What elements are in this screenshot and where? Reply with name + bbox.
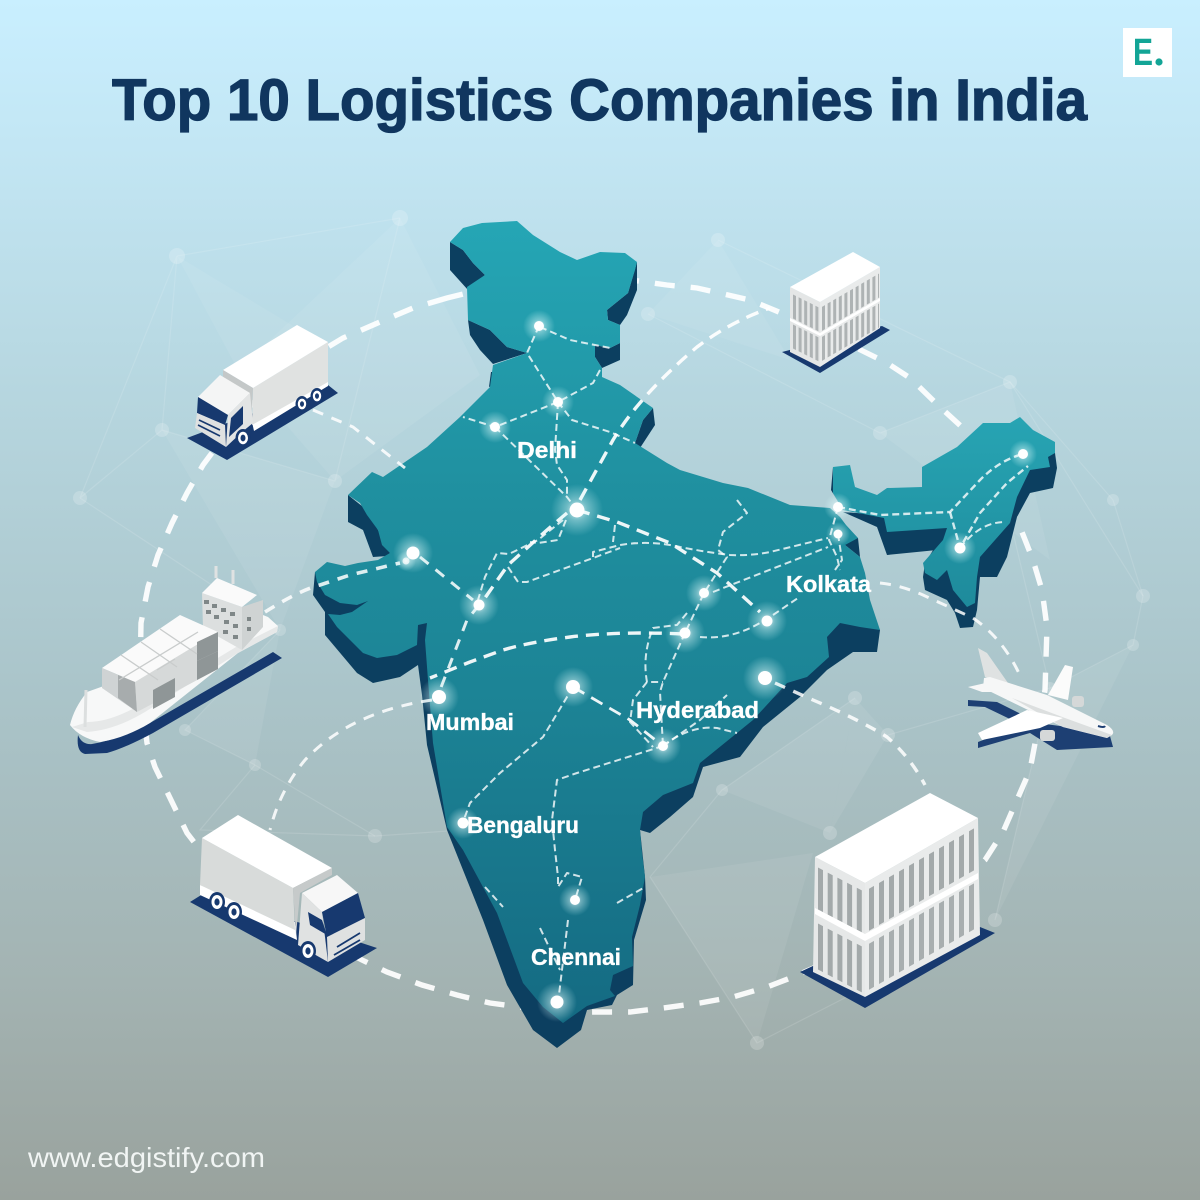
website url: www.edgistify.com	[27, 1142, 265, 1173]
background network mesh	[73, 210, 1150, 1050]
icon: stacked containers bottom right	[800, 793, 995, 1008]
logo badge: E	[1133, 32, 1153, 74]
title: Top 10 Logistics Companies in India	[112, 68, 1088, 133]
dashed circular route ring	[140, 270, 1047, 1012]
city labels: Delhi	[517, 437, 577, 463]
city labels: Hyderabad	[636, 697, 759, 723]
map: India mainland	[313, 221, 880, 1048]
icon: delivery truck top left	[187, 325, 338, 460]
route nodes	[393, 310, 1037, 1022]
city labels	[426, 437, 871, 970]
city labels: Kolkata	[786, 571, 871, 597]
city labels: Mumbai	[426, 709, 514, 735]
icon: airplane	[968, 648, 1113, 750]
city labels: Bengaluru	[467, 812, 579, 838]
city labels: Chennai	[531, 944, 621, 970]
dashed logistics routes	[265, 308, 1028, 1003]
icon: cargo ship	[70, 566, 282, 754]
map: northeast India	[831, 417, 1057, 628]
logo badge	[1123, 28, 1172, 77]
icon: stacked containers top right	[782, 252, 890, 373]
icon: delivery truck bottom left	[190, 815, 377, 977]
